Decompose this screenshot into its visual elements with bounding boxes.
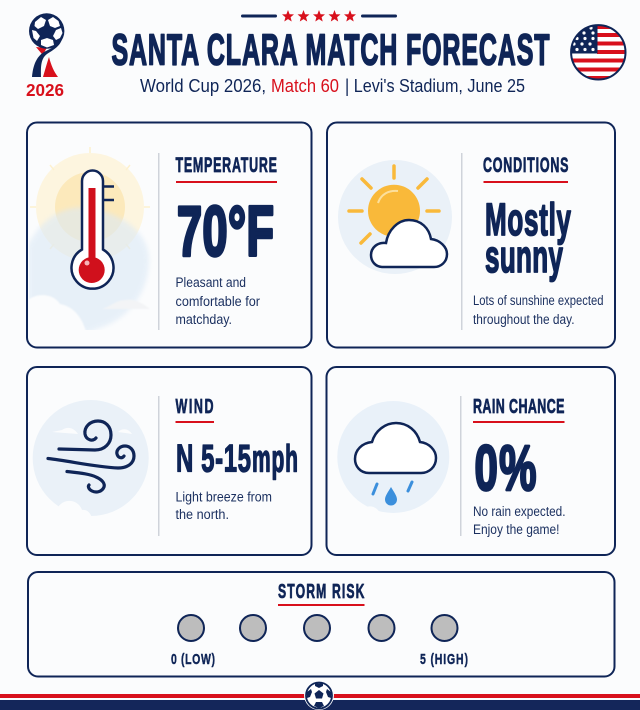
heading: storm risk: STORM RISK (278, 580, 365, 603)
subtitle: Match 60 (271, 75, 339, 96)
description: temperature: matchday. (176, 312, 232, 327)
description: rain chance: Enjoy the game! (473, 522, 560, 537)
description: rain chance: No rain expected. (473, 504, 566, 519)
value: mostly sunny: sunny (485, 230, 563, 282)
value: wind speed (176, 437, 298, 480)
scale labels (171, 650, 468, 667)
icon: rain cloud (337, 401, 449, 520)
header stars and rules (241, 10, 397, 22)
title: SANTA CLARA MATCH FORECAST (112, 25, 550, 74)
scale labels: 5 (HIGH) (420, 650, 468, 667)
description: wind: the north. (176, 507, 229, 522)
subtitle: | Levi's Stadium, June 25 (345, 75, 525, 96)
description: temperature (176, 275, 260, 327)
description: wind: Light breeze from (176, 490, 272, 504)
value: wind speed: N 5-15 (176, 437, 251, 480)
value: 0%: 0% (474, 432, 537, 504)
heading: temperature: TEMPERATURE (176, 152, 277, 177)
heading: conditions: CONDITIONS (483, 152, 568, 177)
footer band with soccer ball (0, 680, 640, 710)
panel: rain chance (326, 367, 615, 555)
heading: rain chance: RAIN CHANCE (473, 395, 564, 418)
description: temperature: Pleasant and (176, 275, 246, 290)
description: rain chance (473, 504, 566, 537)
panel: storm risk (28, 572, 614, 676)
description: wind (176, 490, 272, 522)
icon: sun behind cloud (338, 160, 452, 274)
value: wind speed: mph (252, 438, 298, 480)
subtitle (140, 75, 525, 96)
description: temperature: comfortable for (176, 294, 260, 309)
subtitle: World Cup 2026, (140, 75, 266, 96)
panel: conditions (327, 122, 615, 348)
logo: World Cup 2026 emblem: 2026 (26, 80, 64, 100)
description: conditions: Lots of sunshine expected (473, 293, 604, 308)
heading: wind: WIND (176, 395, 214, 418)
value: mostly sunny (485, 193, 571, 282)
panel: temperature (27, 122, 312, 348)
logo: World Cup 2026 emblem (26, 13, 64, 100)
risk indicator dots (178, 615, 458, 641)
description: conditions: throughout the day. (473, 312, 574, 327)
icon: US flag (570, 24, 628, 82)
scale labels: 0 (LOW) (171, 650, 215, 667)
value: 70°F: 70°F (177, 194, 274, 271)
icon: thermometer with sun and clouds (28, 147, 150, 332)
value: mostly sunny: Mostly (485, 193, 571, 245)
description: conditions (473, 293, 604, 327)
panel: wind (27, 367, 312, 555)
icon: wind gusts (33, 400, 149, 522)
